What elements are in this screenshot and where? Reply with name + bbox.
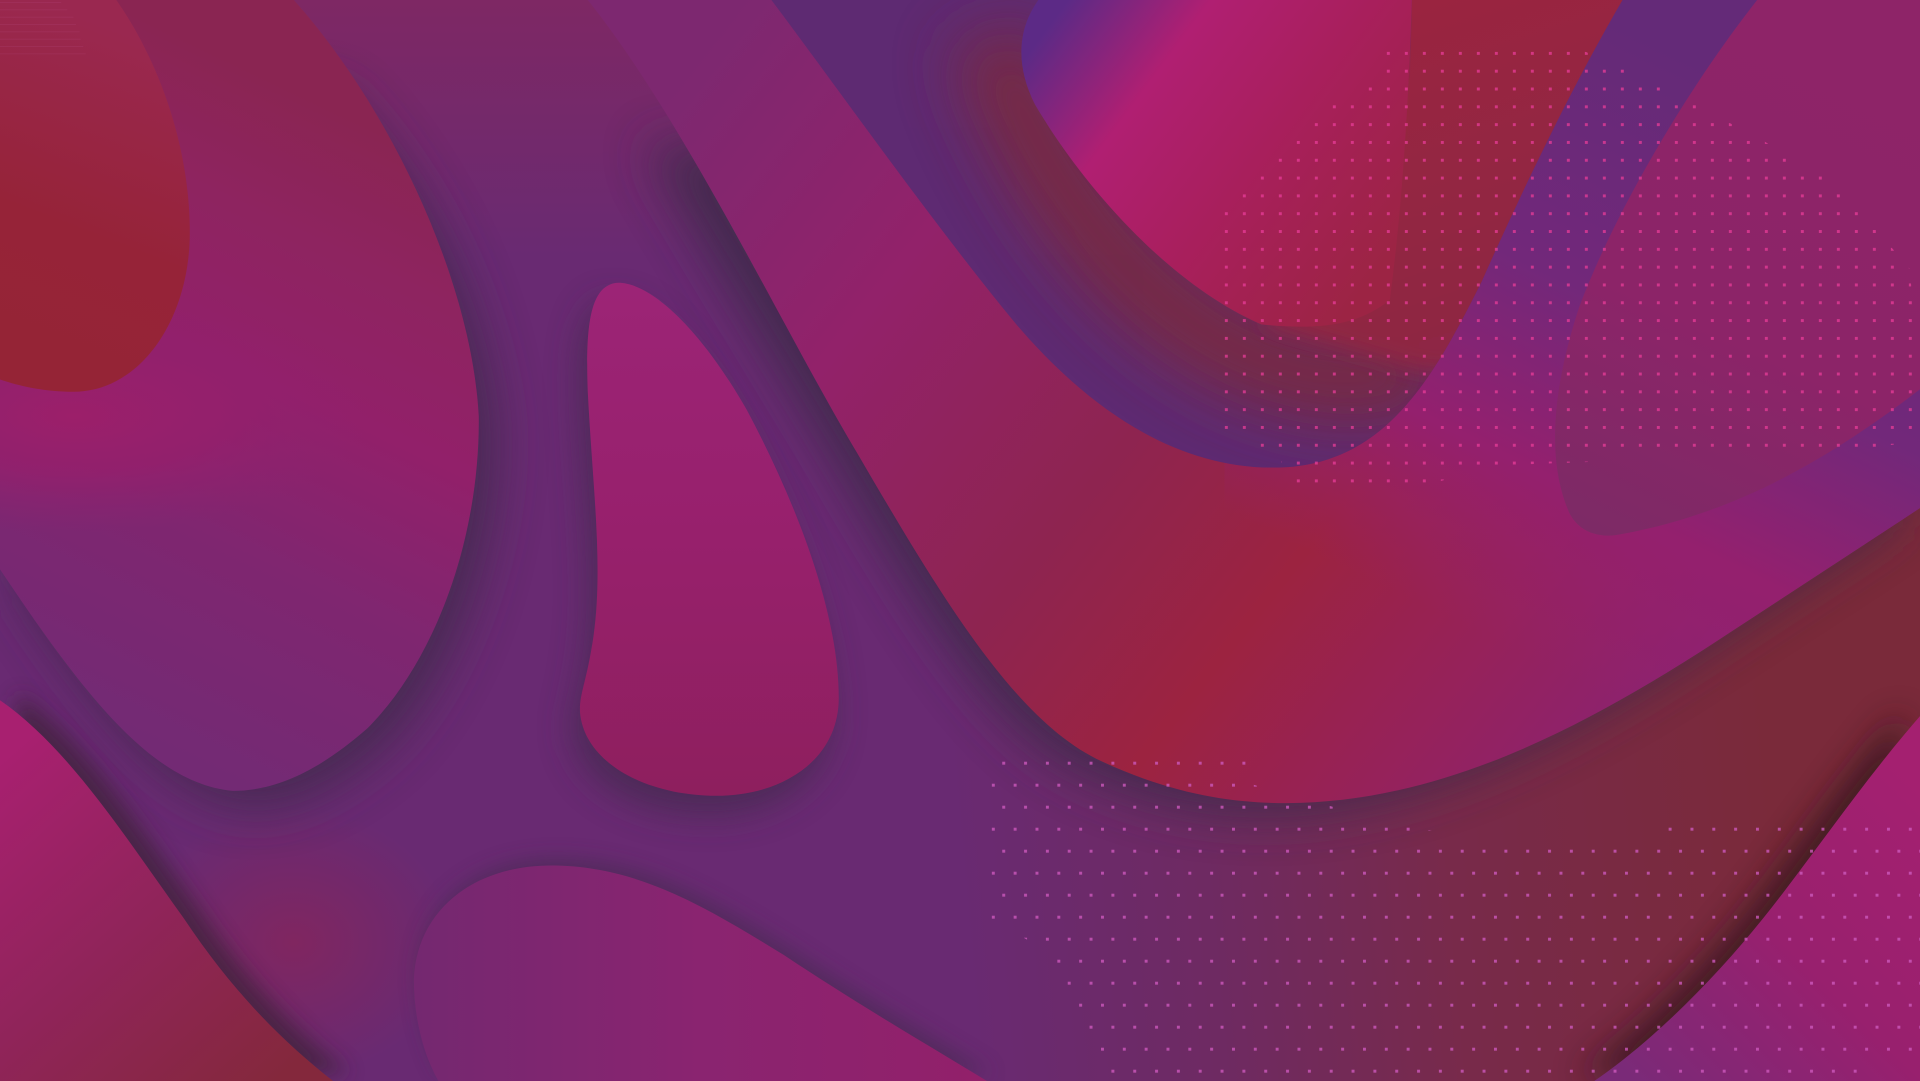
hard-edged top of the red peak [1402, 0, 1622, 214]
soft shadow of lower centre lobe [419, 858, 992, 1074]
soft shadow of big left lobe [17, 91, 496, 808]
central teardrop lobe [580, 283, 839, 796]
lower centre lobe [414, 866, 987, 1081]
magenta lobe inside the cavity [1021, 0, 1412, 327]
upper right purple stripe blending into the band [1224, 0, 1920, 641]
soft shadow of lower-right lobe [1577, 711, 1903, 1076]
magenta fade on the left lobe [0, 372, 221, 502]
maroon tint at top of the purple field [245, 0, 735, 257]
faint lines top-left corner [0, 2, 86, 54]
cavity at the top [772, 0, 1620, 468]
soft shadow of central band [645, 144, 1898, 813]
halftone dots upper right [1224, 49, 1920, 485]
magenta lower-right lobe [1594, 716, 1920, 1081]
halftone dots lower right [989, 757, 1920, 1081]
central wave band [588, 0, 1920, 803]
big left lobe [0, 0, 479, 791]
upper right lobe [1555, 0, 1920, 536]
red upper-left lobe [0, 0, 190, 392]
soft shadow of central teardrop [573, 302, 831, 815]
soft shadow of lower-left lobe [17, 693, 350, 1074]
magenta lower-left lobe [0, 700, 333, 1081]
reddish glow lower-left [135, 808, 453, 1077]
